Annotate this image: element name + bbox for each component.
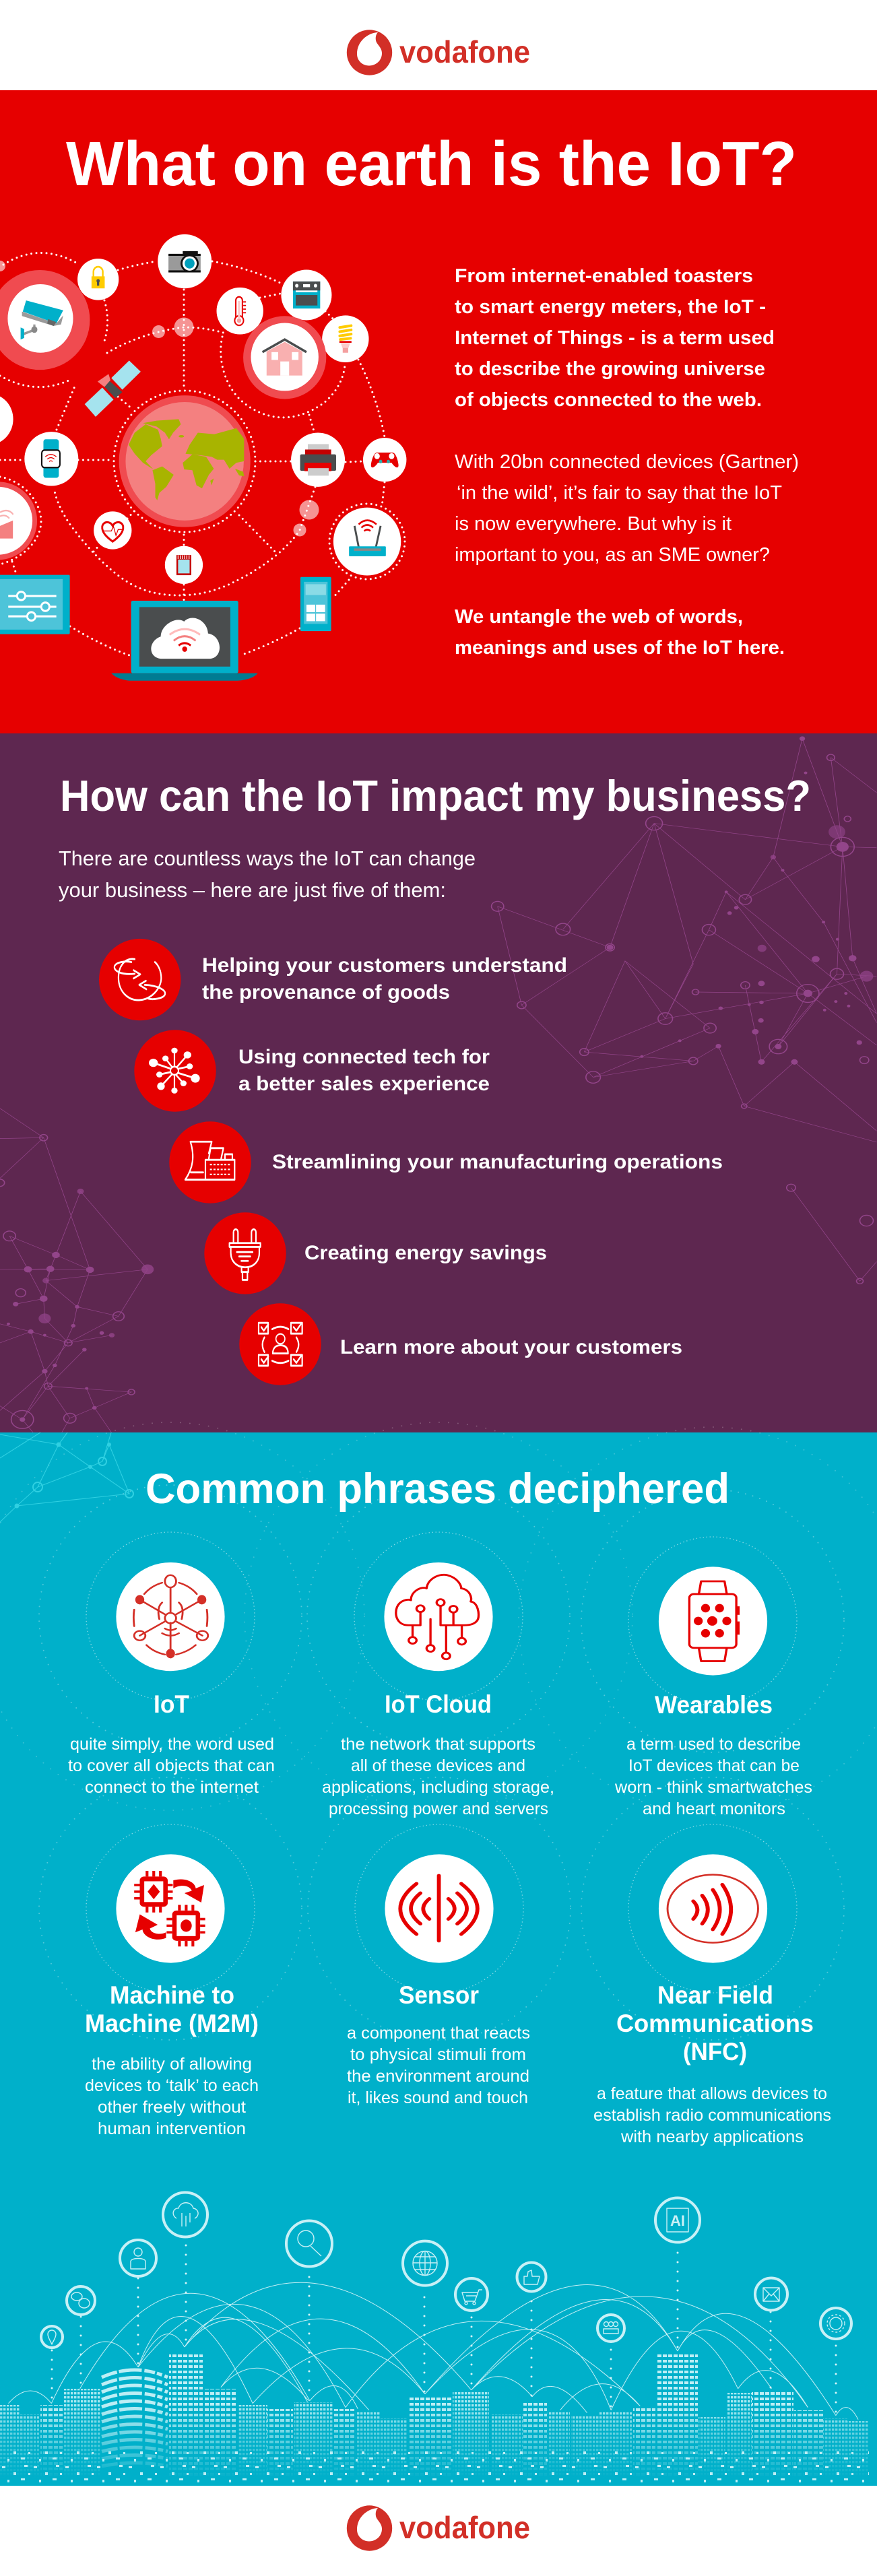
text: provenance: the provenance of goods — [202, 981, 450, 1003]
card title: (NFC) — [683, 2038, 747, 2066]
icon: magnifier — [286, 2221, 332, 2267]
icon: game controller — [363, 438, 406, 482]
intro text block: We untangle the web of words, — [455, 606, 743, 628]
background network: lower left — [0, 1109, 154, 1433]
icon: control panel with sliders — [0, 575, 70, 634]
text: provenance: Helping your customers understand — [202, 954, 567, 977]
card title: IoT — [154, 1690, 189, 1718]
background network: cyan top left — [0, 1432, 133, 1522]
sparse window speckle at street level — [0, 2451, 869, 2486]
card description: and heart monitors — [643, 1799, 785, 1818]
icon: person — [120, 2240, 156, 2276]
icon: shopping cart — [455, 2278, 488, 2311]
card description: the network that supports — [341, 1735, 535, 1754]
card description: with nearby applications — [620, 2127, 804, 2146]
card title: Machine to — [110, 1981, 234, 2009]
intro text block: ‘in the wild’, it’s fair to say that the IoT — [457, 482, 782, 504]
card title: Wearables — [655, 1691, 773, 1719]
card description: a feature that allows devices to — [597, 2084, 827, 2103]
panel: purple business impact section — [0, 733, 877, 1433]
card description: quite simply, the word used — [70, 1735, 274, 1754]
card description: other freely without — [98, 2098, 246, 2117]
icon: AI chip — [655, 2198, 700, 2243]
card description: human intervention — [98, 2119, 246, 2138]
text: customers: Learn more about your customers — [340, 1336, 682, 1358]
card description: processing power and servers — [329, 1799, 548, 1818]
text: sales experience — [238, 1046, 490, 1095]
icon: mobile phone — [300, 577, 331, 631]
icon: heart monitor — [94, 511, 131, 550]
icon: light bulb — [322, 315, 369, 362]
intro text block: meanings and uses of the IoT here. — [455, 637, 785, 659]
icon: gear — [820, 2308, 851, 2339]
card title: Near Field — [657, 1981, 773, 2009]
illustration: connected devices network — [0, 234, 406, 681]
card title: Sensor — [399, 1981, 479, 2009]
icon: IoT network — [116, 1562, 225, 1671]
icon: factory — [169, 1121, 251, 1203]
card: IoT Cloud — [322, 1562, 554, 1818]
panel: teal common phrases section — [0, 1422, 877, 2486]
card: Machine to Machine — [85, 1854, 259, 2138]
icon: memory card — [165, 546, 203, 584]
icon: house — [243, 316, 326, 399]
illustration: smart city skyline — [0, 2193, 869, 2486]
footer: white band with Vodafone logo — [0, 2486, 877, 2576]
card description: a component that reacts — [347, 2024, 530, 2043]
skyline buildings — [0, 2352, 869, 2486]
background network: upper right — [492, 736, 876, 1284]
background dotted rings — [0, 1422, 877, 2040]
icon: camera — [158, 234, 212, 288]
icon: cloud — [163, 2193, 207, 2237]
card description: it, likes sound and touch — [348, 2088, 528, 2107]
intro text block: to smart energy meters, the IoT - — [455, 296, 766, 318]
intro text block: important to you, as an SME owner? — [455, 544, 770, 566]
card description: applications, including storage, — [322, 1778, 554, 1797]
icon: two chips with arrows — [116, 1854, 225, 1963]
header: white band with Vodafone logo: vodafone — [399, 34, 530, 69]
dotted connection lines — [0, 253, 405, 655]
card description: to physical stimuli from — [350, 2045, 526, 2064]
icon: security camera — [0, 270, 90, 370]
heading: Common phrases deciphered — [145, 1465, 729, 1513]
icon: thumbs up — [517, 2263, 546, 2291]
text: energy savings: Creating energy savings — [304, 1242, 547, 1264]
card: IoT — [68, 1562, 275, 1797]
icon: contactless symbol — [659, 1854, 767, 1963]
icon: web globe — [403, 2241, 447, 2286]
text: sales experience: Using connected tech for — [238, 1046, 490, 1068]
icon: printer — [291, 432, 345, 487]
card description: to cover all objects that can — [68, 1756, 275, 1775]
card description: establish radio communications — [593, 2106, 831, 2125]
icon: connected tech hub — [134, 1030, 216, 1112]
icon: customer insights — [239, 1303, 321, 1385]
intro sentence: There are countless ways the IoT can change — [59, 847, 476, 870]
card description — [614, 1735, 812, 1818]
icon: wifi router — [333, 508, 401, 576]
heading: How can the IoT impact my business? — [60, 771, 811, 820]
icon: provenance globe arrows — [99, 939, 181, 1020]
card description: the ability of allowing — [92, 2055, 252, 2074]
icon: chat bubbles — [67, 2286, 95, 2315]
intro sentence — [59, 847, 476, 902]
intro text block: is now everywhere. But why is it — [455, 513, 732, 535]
intro text block: From internet-enabled toasters — [455, 265, 753, 287]
text: provenance — [202, 954, 567, 1003]
card: Near Field Communications — [593, 1854, 831, 2146]
card title — [616, 1981, 814, 2066]
card title — [85, 1981, 259, 2037]
title: What on earth is the IoT? — [66, 129, 797, 199]
icon: map pin — [41, 2326, 63, 2348]
card description — [85, 2055, 259, 2138]
card title: Machine (M2M) — [85, 2010, 259, 2037]
card title: Communications — [616, 2010, 814, 2037]
intro text block — [455, 265, 799, 659]
connection arcs — [8, 2282, 858, 2420]
card description — [347, 2024, 530, 2107]
intro sentence: your business – here are just five of them: — [59, 878, 446, 902]
icon: envelope — [755, 2278, 787, 2310]
icon: smartwatch — [659, 1566, 767, 1676]
header: white band with Vodafone logo — [0, 0, 877, 90]
card description: devices to ‘talk’ to each — [85, 2076, 259, 2095]
intro text block: to describe the growing universe — [455, 358, 765, 380]
intro text block: Internet of Things - is a term used — [455, 327, 775, 349]
list: five business impacts — [99, 939, 723, 1385]
card description: the environment around — [347, 2067, 529, 2086]
card description: all of these devices and — [351, 1756, 525, 1775]
icon: AI chip: AI — [670, 2212, 685, 2229]
icon: cloud circuit — [384, 1562, 493, 1671]
card description: IoT devices that can be — [628, 1756, 800, 1775]
icon: group of people — [597, 2315, 624, 2342]
card description: worn - think smartwatches — [614, 1778, 812, 1797]
icon: globe — [119, 395, 251, 527]
small pink nodes — [0, 261, 319, 536]
icon: partly visible device circle — [0, 393, 13, 444]
text: manufacturing: Streamlining your manufacturing operations — [272, 1151, 723, 1173]
icon: padlock — [77, 259, 119, 300]
card description: a term used to describe — [626, 1735, 801, 1754]
footer: white band with Vodafone logo: vodafone — [399, 2510, 530, 2545]
icon: laptop with cloud — [111, 601, 258, 681]
intro text block: of objects connected to the web. — [455, 389, 762, 411]
card title: IoT Cloud — [385, 1690, 492, 1718]
icon: plug — [204, 1212, 286, 1294]
icon: oven — [281, 270, 331, 321]
icon: thermometer — [217, 288, 263, 335]
icon: satellite — [85, 360, 141, 417]
intro text block: With 20bn connected devices (Gartner) — [455, 451, 799, 473]
icon: sensor waves — [385, 1854, 494, 1963]
card: Wearables — [614, 1566, 812, 1818]
card description: connect to the internet — [85, 1778, 259, 1797]
icon: smart watch — [24, 432, 78, 486]
card description — [322, 1735, 554, 1818]
panel: red intro section — [0, 90, 877, 733]
text: sales experience: a better sales experience — [238, 1073, 490, 1095]
vertical dotted links — [52, 2245, 836, 2414]
icon: connected factory — [0, 482, 37, 560]
card: Sensor — [347, 1854, 530, 2107]
card description — [593, 2084, 831, 2146]
device icons — [0, 234, 406, 681]
card description — [68, 1735, 275, 1797]
